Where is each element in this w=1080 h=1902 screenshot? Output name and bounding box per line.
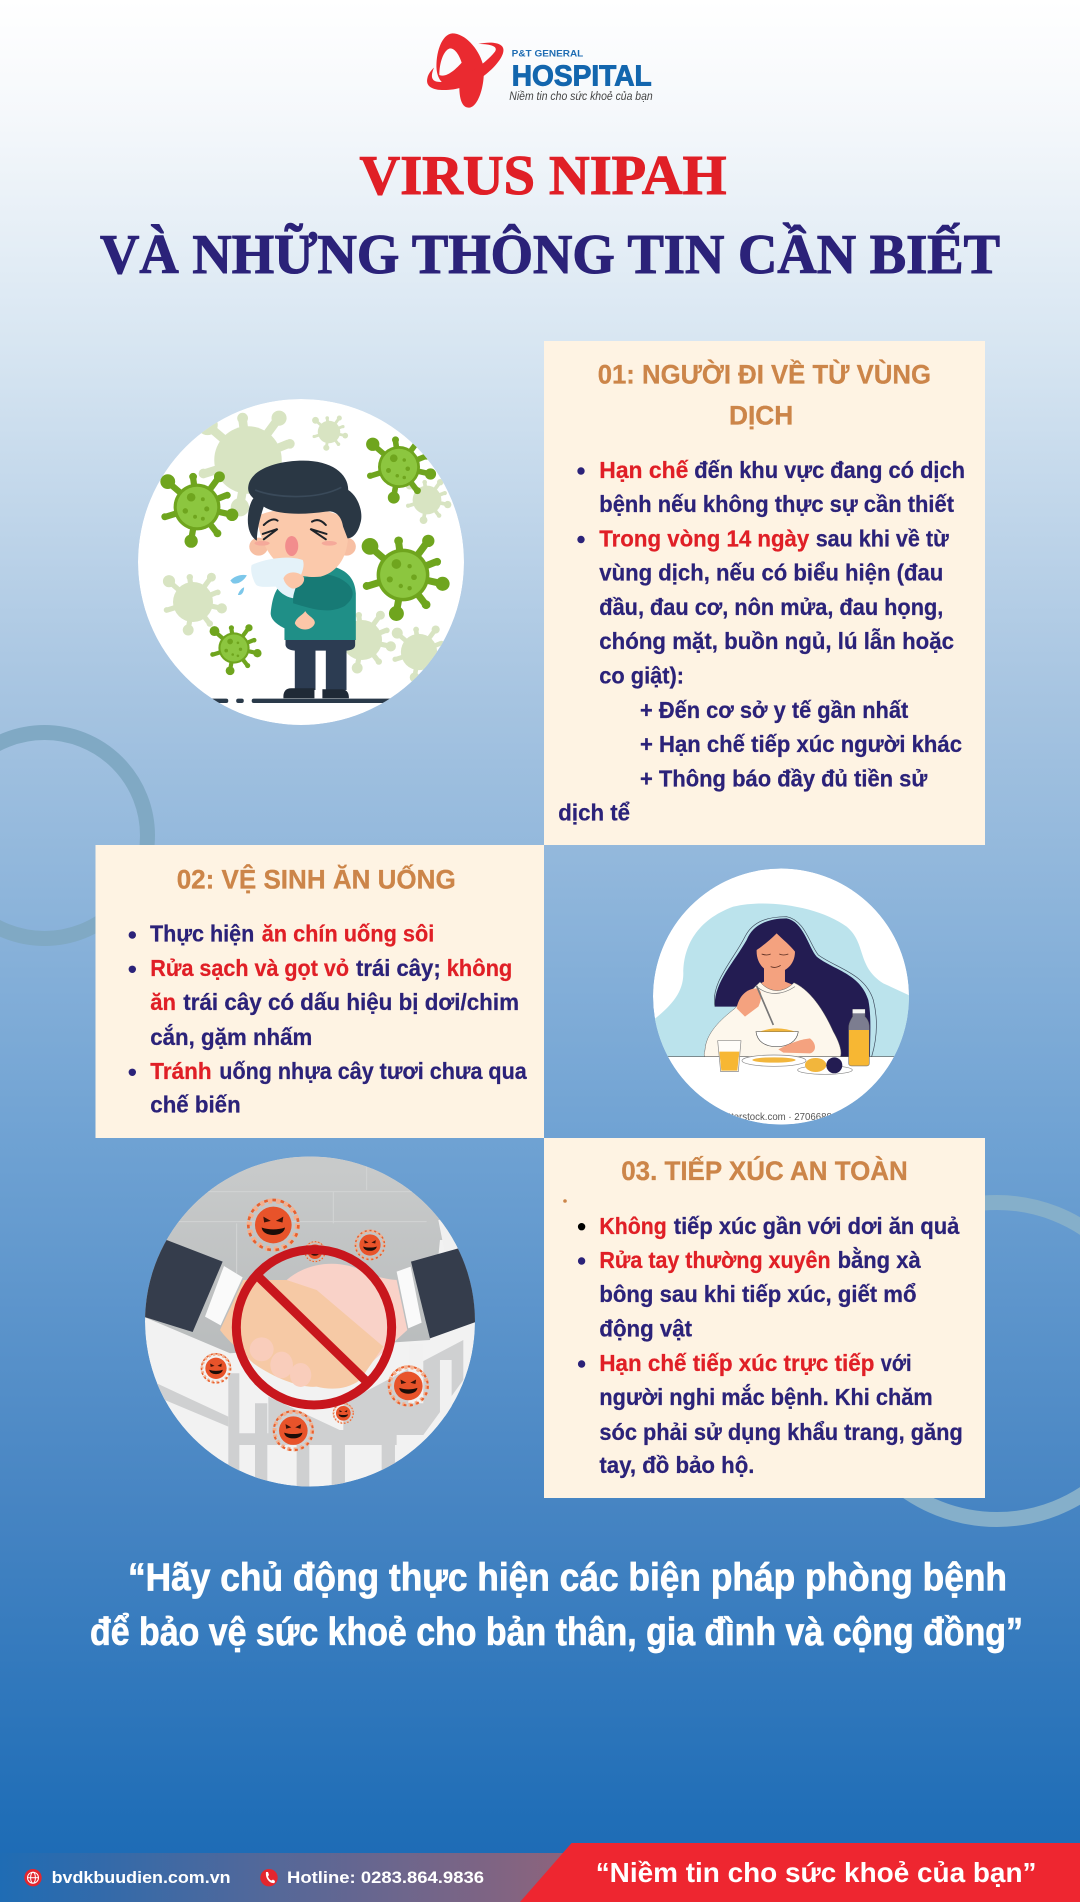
list 03: động vật <box>599 1316 692 1342</box>
logo text: Hospital: HOSPITAL <box>512 61 652 93</box>
list 03: sóc phải sử dụng khẩu trang, găng <box>599 1419 963 1445</box>
wall <box>143 1153 477 1353</box>
list 01: dịch tể <box>558 800 630 826</box>
neck and face <box>761 968 792 991</box>
ears <box>249 538 268 556</box>
list 03: với <box>881 1350 912 1376</box>
heading 01 <box>598 358 931 431</box>
list 01: bệnh nếu không thực sự cần thiết <box>599 491 954 517</box>
viruses <box>248 1200 298 1250</box>
list 02: chế biến <box>150 1092 241 1118</box>
logo: P&T General Hospital <box>427 33 653 108</box>
list 02: Rửa sạch và gọt vỏ <box>150 955 349 981</box>
bowl <box>756 1032 798 1047</box>
icon: pale viruses <box>163 411 451 682</box>
icon: prohibition sign <box>236 1250 392 1405</box>
heading 01: 01: NGƯỜI ĐI VỀ TỪ VÙNG <box>598 358 931 389</box>
tissue <box>251 558 304 598</box>
website: bvdkbuudien.com.vn <box>52 1869 231 1887</box>
logo text: tagline: Niềm tin cho sức khoẻ của bạn <box>509 91 653 103</box>
icon: green viruses <box>160 435 450 675</box>
list 02: ăn <box>150 989 176 1015</box>
legs <box>285 638 355 690</box>
arm and hand <box>737 988 761 1017</box>
title <box>100 145 1000 286</box>
list 02: trái cây; <box>356 955 441 981</box>
logo text: P&T General: P&T GENERAL <box>512 49 584 59</box>
window shadows <box>157 1340 463 1487</box>
title line 1: VIRUS NIPAH <box>360 145 726 207</box>
hair <box>248 461 361 541</box>
suit sleeves <box>143 1240 223 1332</box>
heading 03: 03. TIẾP XÚC AN TOÀN <box>621 1155 908 1186</box>
list 01: đầu, đau cơ, nôn mửa, đau họng, <box>599 594 943 620</box>
decorative ring left <box>0 732 148 938</box>
heading 01: DỊCH <box>729 401 793 431</box>
icon: sneezing man <box>210 461 393 703</box>
backdrop blob <box>653 903 910 1057</box>
nose <box>285 536 298 556</box>
closing quote: “Hãy chủ động thực hiện các biện pháp phòng bệnh <box>128 1557 1007 1600</box>
eyes <box>263 519 327 539</box>
list 03: Hạn chế tiếp xúc trực tiếp <box>599 1350 874 1376</box>
shirt cuffs <box>205 1266 243 1325</box>
illustration: no handshake with viruses <box>143 1153 477 1487</box>
list 03 <box>578 1213 963 1478</box>
icon: hospital red emblem <box>427 33 505 108</box>
hands <box>287 1264 407 1370</box>
illustration: woman eating <box>653 868 910 1127</box>
list 02 <box>129 921 528 1118</box>
table <box>668 1057 894 1124</box>
illustration: man sneezing with viruses <box>138 399 464 725</box>
sweater <box>704 982 841 1057</box>
slogan: “Niềm tin cho sức khoẻ của bạn” <box>596 1857 1036 1888</box>
list 01: vùng dịch, nếu có biểu hiện (đau <box>599 560 943 586</box>
list 02: trái cây có dấu hiệu bị dơi/chim <box>183 989 519 1015</box>
ground <box>210 699 393 703</box>
list 01: Trong vòng 14 ngày <box>599 526 809 552</box>
list 03: tay, đồ bảo hộ. <box>599 1452 754 1478</box>
panel 02: food hygiene <box>96 845 544 1138</box>
list 01: chóng mặt, buồn ngủ, lú lẫn hoặc <box>599 627 954 654</box>
list 03: tiếp xúc gần với dơi ăn quả <box>674 1213 960 1239</box>
droplets <box>230 575 247 595</box>
list 01: + Hạn chế tiếp xúc người khác <box>640 731 962 757</box>
list 02: không <box>447 955 512 981</box>
list 01: co giật): <box>599 663 684 689</box>
list 02: cắn, gặm nhấm <box>150 1023 312 1050</box>
icon: phone <box>260 1869 278 1886</box>
list 02: ăn chín uống sôi <box>262 921 434 947</box>
decorative ring right <box>838 1202 1080 1520</box>
closing quote <box>90 1557 1023 1654</box>
plates and food <box>742 1055 806 1066</box>
list 03: người nghi mắc bệnh. Khi chăm <box>599 1383 933 1410</box>
footer bar <box>0 1843 1080 1902</box>
heading 02: 02: VỆ SINH ĂN UỐNG <box>177 862 456 894</box>
glass of juice <box>718 1041 741 1072</box>
list 02: Tránh <box>150 1058 212 1084</box>
icon: globe <box>24 1869 42 1886</box>
list 02: Thực hiện <box>150 921 254 947</box>
list 03: Không <box>599 1213 667 1239</box>
list 01: đến khu vực đang có dịch <box>694 457 965 483</box>
list 01: + Thông báo đầy đủ tiền sử <box>640 766 928 792</box>
hotline: Hotline: 0283.864.9836 <box>287 1869 484 1887</box>
hair <box>715 918 870 1057</box>
title line 2: VÀ NHỮNG THÔNG TIN CẦN BIẾT <box>100 222 1000 286</box>
bottle <box>849 1009 869 1066</box>
sweater <box>271 566 356 640</box>
panel 01: people returning from epidemic areas <box>544 341 985 845</box>
list 02: uống nhựa cây tươi chưa qua <box>219 1058 528 1084</box>
list 01: + Đến cơ sở y tế gần nhất <box>640 697 908 723</box>
panel 03: safe contact <box>544 1138 985 1498</box>
face <box>257 508 348 577</box>
footer red slogan block <box>520 1843 1080 1902</box>
list 03: bông sau khi tiếp xúc, giết mổ <box>599 1281 916 1307</box>
list 01: sau khi về từ <box>816 526 950 552</box>
list 01: Hạn chế <box>599 457 689 483</box>
list 03: Rửa tay thường xuyên <box>599 1247 831 1273</box>
watermark: tterstock.com · 2706688 <box>728 1112 832 1123</box>
list 01 <box>558 457 965 826</box>
list 03: bằng xà <box>838 1246 922 1273</box>
